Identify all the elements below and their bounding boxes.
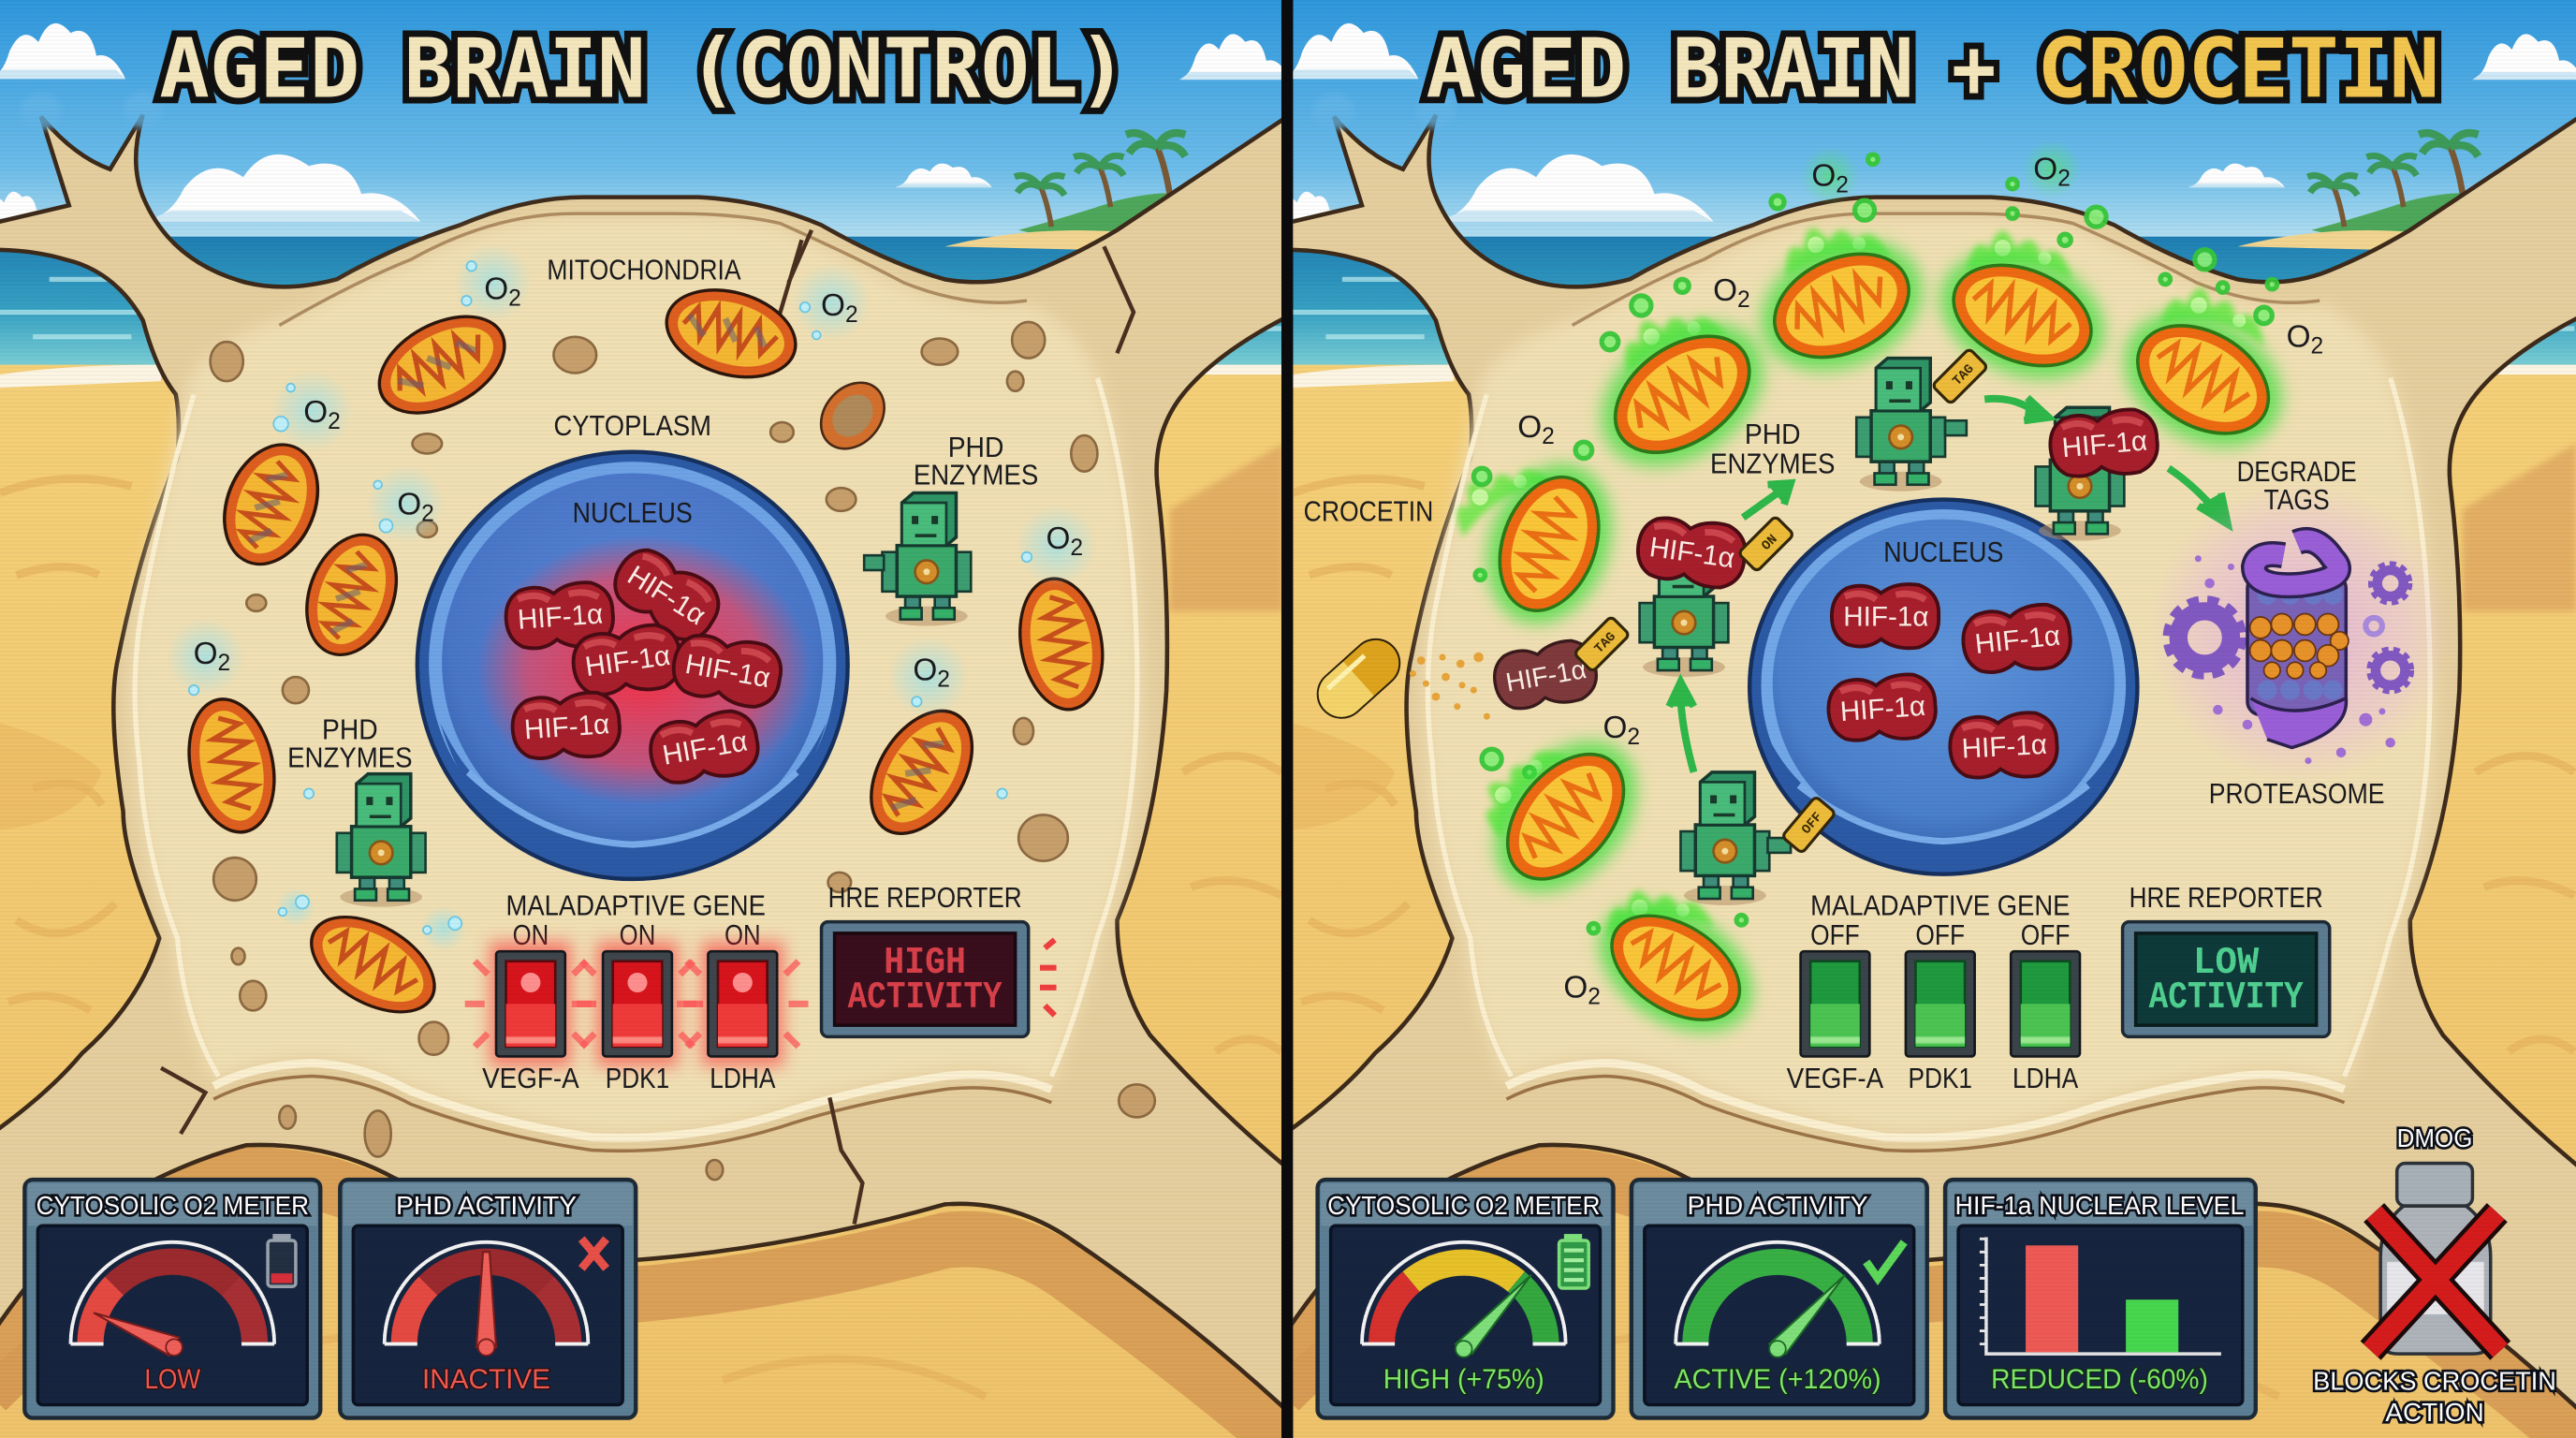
label: proteasome: PROTEASOME: [2209, 777, 2385, 810]
chart: HIF-1a nuclear level: HIF-1a NUCLEAR LEVEL: [1955, 1191, 2244, 1220]
proteasome: TAGS: [2264, 483, 2330, 516]
center divider: [1281, 0, 1293, 1438]
HIF-1a cluster: HIF-1α: [622, 560, 710, 631]
gauge: cytosolic O2 meter: LOW: [144, 1364, 201, 1395]
PHD enzymes robot left: PHD: [322, 713, 378, 746]
arrow up to ON robot: [1669, 682, 1694, 772]
maladaptive gene switches: ON: [620, 918, 655, 951]
gauge: PHD activity active: PHD ACTIVITY: [1687, 1191, 1868, 1220]
maladaptive gene switches off: OFF: [1915, 918, 1965, 951]
mitochondrion G: [1575, 877, 1776, 1059]
HRE reporter high activity: HRE REPORTER: [828, 881, 1022, 914]
mitochondrion D: [2100, 286, 2305, 474]
proteasome: [2149, 455, 2452, 810]
HIF-1a cluster: HIF-1α: [517, 599, 604, 636]
oxygen markers: O: [194, 637, 218, 671]
mitochondrion B: [1740, 216, 1942, 395]
robot with ON tag: [1634, 513, 1794, 677]
oxygen markers: O: [1046, 521, 1070, 556]
PHD enzymes robot right: ENZYMES: [914, 459, 1038, 492]
heading: aged brain plus crocetin: CROCETIN: [2037, 22, 2439, 117]
faded HIF with tag: [1490, 616, 1630, 714]
gauge: PHD activity inactive: PHD ACTIVITY: [396, 1191, 577, 1220]
heading: aged brain control: (CONTROL): [688, 22, 1127, 117]
cell cracks and granules: [161, 230, 1155, 1224]
heading: aged brain plus crocetin: AGED: [1426, 22, 1627, 117]
HIF-1a cluster: [504, 539, 785, 788]
chart: HIF-1a nuclear level: REDUCED (-60%): [1991, 1364, 2208, 1395]
faded HIF with tag: HIF-1α: [1503, 654, 1588, 698]
maladaptive gene switches: VEGF-A: [482, 1062, 579, 1094]
pathway arrows: [1669, 398, 2228, 772]
gauge: PHD activity active: ACTIVE (+120%): [1674, 1364, 1881, 1395]
robot with ON tag: HIF-1α: [1647, 532, 1736, 574]
beach and neuron background right: [1270, 0, 2576, 1438]
HRE reporter low activity: HRE REPORTER: [2130, 881, 2323, 914]
label: PHD enzymes: [1710, 418, 1835, 479]
gauge: cytosolic O2 meter high: HIGH (+75%): [1383, 1364, 1544, 1395]
gauge: PHD activity inactive: INACTIVE: [422, 1364, 550, 1395]
oxygen markers: O: [397, 487, 421, 521]
HRE reporter high activity: HIGH: [884, 942, 966, 985]
arrow up to PHD enzymes: [1743, 483, 1791, 518]
mitochondria group: [176, 274, 1114, 1034]
gauge: cytosolic O2 meter high: CYTOSOLIC O2 METER: [1327, 1191, 1600, 1220]
HRE reporter high activity: ACTIVITY: [848, 976, 1003, 1020]
nucleus right: HIF-1α: [1973, 621, 2061, 660]
HIF-1a cluster: HIF-1α: [583, 640, 672, 682]
oxygen markers right: O: [2287, 319, 2311, 354]
heading: aged brain control: BRAIN: [404, 22, 646, 117]
oxygen markers right: O: [1517, 410, 1542, 445]
HIF-1a cluster: HIF-1α: [523, 709, 610, 745]
proteasome gears: [2167, 564, 2411, 692]
oxygen markers right: O: [2033, 152, 2057, 186]
heading: aged brain control: [159, 22, 1127, 117]
oxygen markers: 2: [421, 501, 434, 526]
HRE reporter low activity: [2123, 881, 2330, 1036]
flames and bubbles: [1442, 154, 2277, 937]
heading: aged brain control: AGED: [159, 22, 359, 117]
maladaptive gene switches: ON: [513, 918, 549, 951]
label: cytoplasm: CYTOPLASM: [553, 409, 711, 442]
DMOG blocked bottle: [2313, 1123, 2556, 1427]
robot with OFF tag: OFF: [1799, 810, 1826, 838]
right panel contents: [1304, 22, 2556, 1427]
maladaptive gene switches: MALADAPTIVE GENE: [506, 889, 766, 922]
maladaptive gene switches off: OFF: [1810, 918, 1860, 951]
crocetin capsule and label: CROCETIN: [1304, 494, 1433, 527]
mitochondrion 7: [870, 710, 973, 835]
oxygen markers: O: [484, 271, 508, 306]
PHD enzymes robot right: [864, 431, 1038, 626]
beach and neuron background: [0, 0, 1314, 1438]
proteasome: DEGRADE: [2237, 455, 2357, 488]
maladaptive gene switches off: LDHA: [2012, 1062, 2079, 1094]
label: nucleus right: NUCLEUS: [1883, 536, 2003, 568]
HRE reporter low activity: LOW: [2193, 942, 2260, 985]
PHD enzymes robot right: PHD: [948, 431, 1003, 463]
oxygen markers right: O: [1563, 970, 1588, 1005]
label: mitochondria: MITOCHONDRIA: [547, 253, 741, 286]
robot with OFF tag: [1680, 772, 1836, 905]
arrow to proteasome: [2169, 468, 2228, 524]
nucleus right: HIF-1α: [1843, 602, 1928, 633]
oxygen markers: 2: [937, 668, 950, 693]
nucleus right: HIF-1α: [1839, 691, 1926, 727]
oxygen markers: O: [821, 288, 845, 323]
chart: HIF-1a nuclear level: [1945, 1180, 2256, 1418]
mitochondrion 4: [305, 534, 399, 656]
oxygen markers: 2: [845, 302, 858, 328]
mitochondrion 5: [187, 697, 276, 834]
HRE reporter low activity: ACTIVITY: [2149, 976, 2304, 1020]
oxygen markers: [166, 243, 1097, 951]
HIF-1a cluster: HIF-1α: [660, 726, 750, 771]
oxygen markers right: O: [1713, 273, 1737, 308]
oxygen markers right: 2: [1588, 984, 1601, 1009]
DMOG blocked bottle: BLOCKS CROCETIN: [2313, 1367, 2556, 1396]
oxygen markers: O: [303, 395, 328, 430]
gauge: PHD activity inactive: [340, 1180, 636, 1418]
robot with ON tag: ON: [1759, 532, 1780, 554]
oxygen markers right: [1517, 139, 2323, 1009]
robot carrying HIF: HIF-1α: [2060, 425, 2148, 463]
mitochondrion E: [1466, 447, 1633, 641]
panel: aged brain plus crocetin: [1270, 0, 2576, 1438]
oxygen markers: 2: [328, 409, 341, 434]
oxygen markers right: 2: [2057, 166, 2071, 191]
HIF-1a cluster: HIF-1α: [683, 649, 772, 694]
gauge: cytosolic O2 meter: [24, 1180, 320, 1418]
oxygen markers right: O: [1811, 158, 1836, 193]
mitochondrion 1: [378, 315, 506, 415]
oxygen markers: 2: [1070, 536, 1083, 561]
small vesicle: [820, 382, 886, 450]
oxygen markers right: 2: [1627, 725, 1640, 750]
oxygen markers right: O: [1603, 711, 1627, 745]
crocetin capsule and label: [1304, 494, 1630, 726]
robot carrying HIF: [2036, 407, 2159, 540]
maladaptive gene switches: ON: [724, 918, 761, 951]
activated mitochondria: [1442, 154, 2305, 1059]
label: nucleus: NUCLEUS: [573, 496, 693, 529]
mitochondrion 6: [310, 916, 436, 1013]
oxygen markers right: 2: [1542, 424, 1555, 449]
PHD enzymes robot left: ENZYMES: [287, 741, 413, 774]
heading: aged brain plus crocetin: [1426, 22, 2439, 117]
heading: aged brain plus crocetin: +: [1952, 22, 1996, 117]
arrow to tagged HIF: [1984, 398, 2049, 420]
PHD cycle robots: [1634, 348, 2159, 905]
gauge: cytosolic O2 meter: CYTOSOLIC O2 METER: [37, 1191, 309, 1220]
nucleus right: [1749, 500, 2137, 874]
DMOG blocked bottle: DMOG: [2397, 1123, 2472, 1152]
nucleus: [417, 452, 848, 879]
robot with TAG: TAG: [1950, 361, 1978, 389]
gauge: PHD activity active: [1632, 1180, 1927, 1418]
maladaptive gene switches off: MALADAPTIVE GENE: [1810, 889, 2070, 922]
oxygen markers: O: [913, 653, 937, 688]
robot with TAG: [1856, 348, 1988, 492]
maladaptive gene switches off: PDK1: [1909, 1062, 1972, 1094]
maladaptive gene switches: [465, 889, 809, 1094]
oxygen markers right: 2: [1836, 172, 1849, 198]
maladaptive gene switches: LDHA: [710, 1062, 776, 1094]
mitochondrion 2: [665, 288, 798, 378]
oxygen markers right: 2: [1737, 287, 1750, 313]
mitochondrion 8: [1018, 577, 1105, 712]
maladaptive gene switches off: [1787, 889, 2080, 1094]
PHD enzymes robot left: [287, 713, 426, 907]
gauge: cytosolic O2 meter high: [1318, 1180, 1614, 1418]
label: PHD enzymes: ENZYMES: [1710, 447, 1835, 479]
heading: aged brain plus crocetin: BRAIN: [1673, 22, 1914, 117]
DMOG blocked bottle: ACTION: [2385, 1398, 2484, 1427]
maladaptive gene switches: PDK1: [606, 1062, 669, 1094]
nucleus right: HIF-1α: [1961, 729, 2048, 765]
panel: aged brain control: [0, 0, 1314, 1438]
HRE reporter high activity: [822, 881, 1057, 1036]
maladaptive gene switches off: VEGF-A: [1787, 1062, 1884, 1094]
label: PHD enzymes: PHD: [1745, 418, 1801, 450]
mitochondrion 3: [223, 443, 320, 565]
mitochondrion F: [1466, 713, 1665, 919]
oxygen markers: 2: [218, 651, 230, 676]
oxygen markers: 2: [508, 286, 521, 311]
maladaptive gene switches off: OFF: [2021, 918, 2070, 951]
mitochondrion A: [1574, 293, 1791, 495]
oxygen markers right: 2: [2311, 333, 2323, 359]
mitochondrion C: [1921, 229, 2124, 402]
faded HIF with tag: TAG: [1592, 630, 1619, 657]
